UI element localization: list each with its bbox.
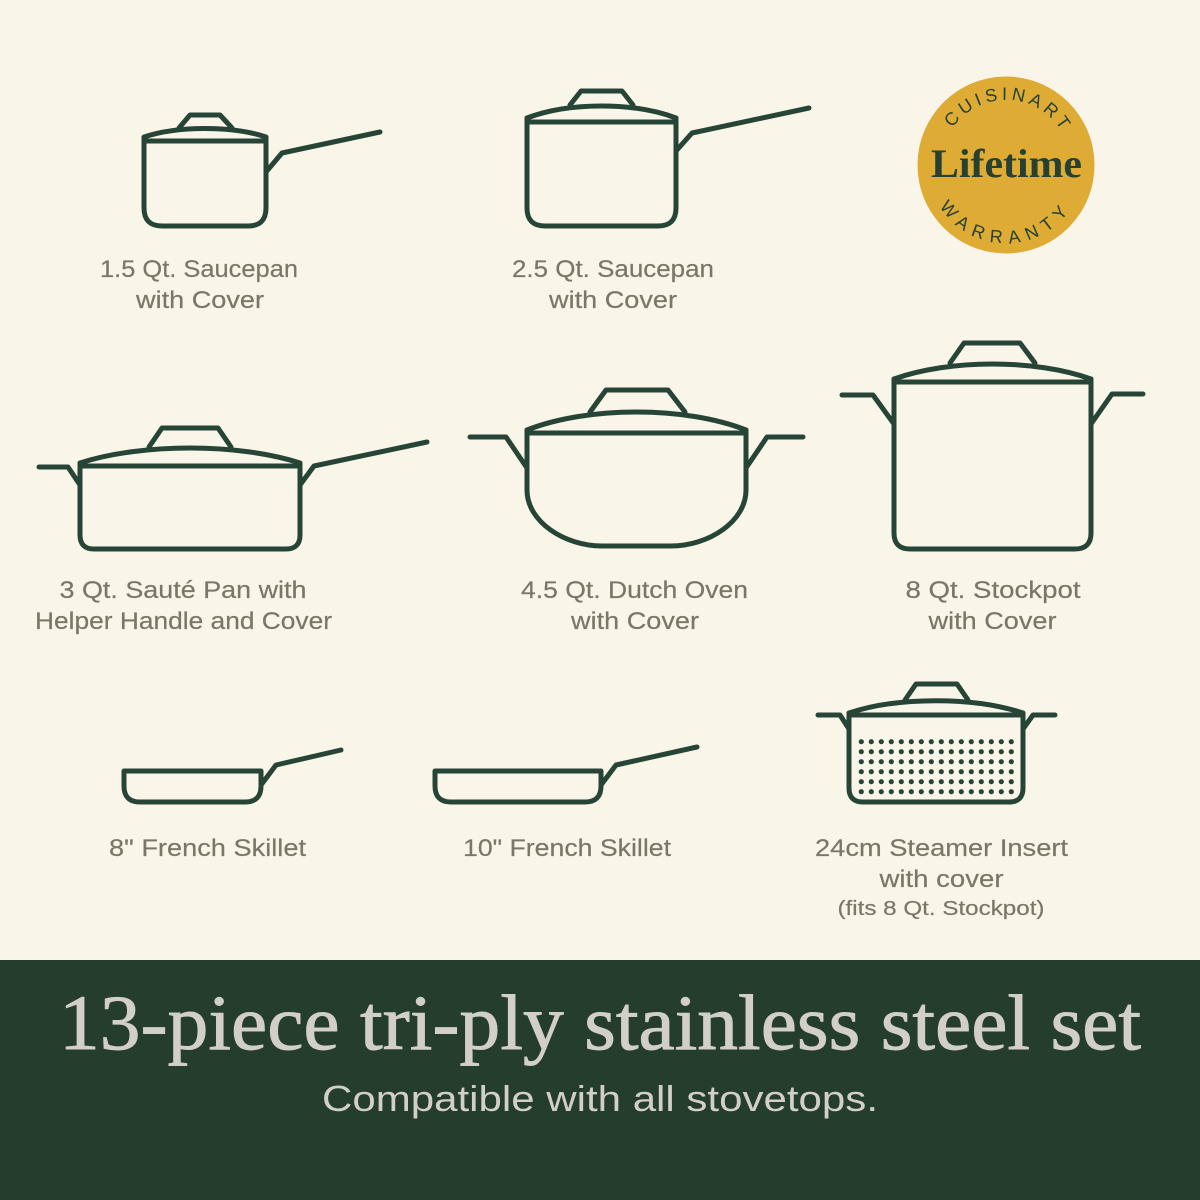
steamer perforation dots	[861, 742, 1012, 792]
label: 8 inch French skillet: 8" French Skillet	[109, 835, 306, 862]
icon: 10 inch French skillet	[435, 747, 697, 802]
icon: 8 inch French skillet	[124, 750, 341, 802]
icon: 3 Qt saute pan	[39, 428, 427, 549]
label: 1.5 Qt saucepan: 1.5 Qt. Saucepan	[100, 256, 298, 283]
banner heading: 13-piece tri-ply stainless steel set	[59, 979, 1141, 1066]
banner	[0, 960, 1200, 1200]
icon: 8 Qt stockpot	[842, 343, 1143, 549]
badge: Cuisinart Lifetime Warranty	[918, 76, 1094, 254]
icon: 1.5 Qt saucepan	[144, 115, 380, 226]
icon: 4.5 Qt Dutch oven	[470, 390, 803, 546]
label: 4.5 Qt Dutch oven: with Cover	[570, 608, 699, 635]
label: 2.5 Qt saucepan	[512, 256, 714, 314]
label: 4.5 Qt Dutch oven	[521, 577, 748, 635]
banner subheading: Compatible with all stovetops.	[322, 1078, 878, 1119]
label: 24cm steamer insert: 24cm Steamer Insert	[815, 835, 1068, 862]
label: 8 Qt stockpot	[906, 577, 1081, 635]
label: 3 Qt saute pan: Helper Handle and Cover	[35, 608, 332, 635]
label: 24cm steamer insert: (fits 8 Qt. Stockpot)	[838, 897, 1044, 920]
label: 3 Qt saute pan	[35, 577, 332, 635]
label: 1.5 Qt saucepan	[100, 256, 298, 314]
label: 8 Qt stockpot: with Cover	[927, 608, 1056, 635]
label: 24cm steamer insert	[815, 835, 1068, 920]
label: 24cm steamer insert: with cover	[878, 866, 1004, 893]
label: 1.5 Qt saucepan: with Cover	[135, 287, 264, 314]
icon: 24cm steamer insert	[818, 684, 1055, 802]
label: 4.5 Qt Dutch oven: 4.5 Qt. Dutch Oven	[521, 577, 748, 604]
label: 8 Qt stockpot: 8 Qt. Stockpot	[906, 577, 1081, 604]
badge: Cuisinart Lifetime Warranty: WARRANTY	[942, 198, 1066, 244]
label: 3 Qt saute pan: 3 Qt. Sauté Pan with	[60, 577, 306, 604]
label: 10 inch French skillet: 10" French Skillet	[463, 835, 671, 862]
badge: Cuisinart Lifetime Warranty: CUISINART	[945, 88, 1071, 126]
icon: 2.5 Qt saucepan	[527, 91, 809, 226]
label: 2.5 Qt saucepan: 2.5 Qt. Saucepan	[512, 256, 714, 283]
label: 2.5 Qt saucepan: with Cover	[548, 287, 677, 314]
badge: Cuisinart Lifetime Warranty: Lifetime	[931, 141, 1082, 186]
